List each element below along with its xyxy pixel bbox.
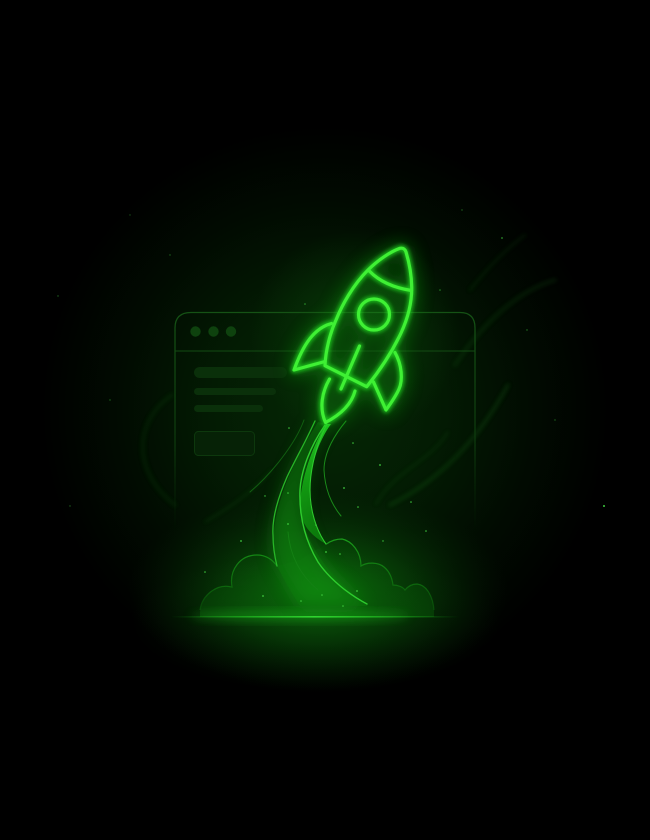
browser window	[175, 312, 475, 530]
rocket outer glow	[294, 248, 412, 422]
faint light wisps	[143, 235, 555, 522]
trail body	[273, 422, 368, 606]
rocket neon line	[294, 248, 412, 422]
stars	[57, 209, 605, 607]
rocket inner glow	[294, 248, 412, 422]
trail lines	[250, 420, 367, 604]
content placeholder bars	[194, 367, 287, 412]
exhaust trail	[250, 420, 368, 606]
placeholder button	[194, 432, 254, 456]
trail glow	[272, 420, 366, 606]
smoke clouds	[200, 539, 434, 617]
window frame	[175, 312, 475, 530]
horizon light line	[170, 611, 460, 621]
rocket	[294, 248, 412, 422]
window control dots	[190, 326, 236, 337]
window header divider	[175, 350, 475, 352]
trail core	[300, 424, 331, 544]
